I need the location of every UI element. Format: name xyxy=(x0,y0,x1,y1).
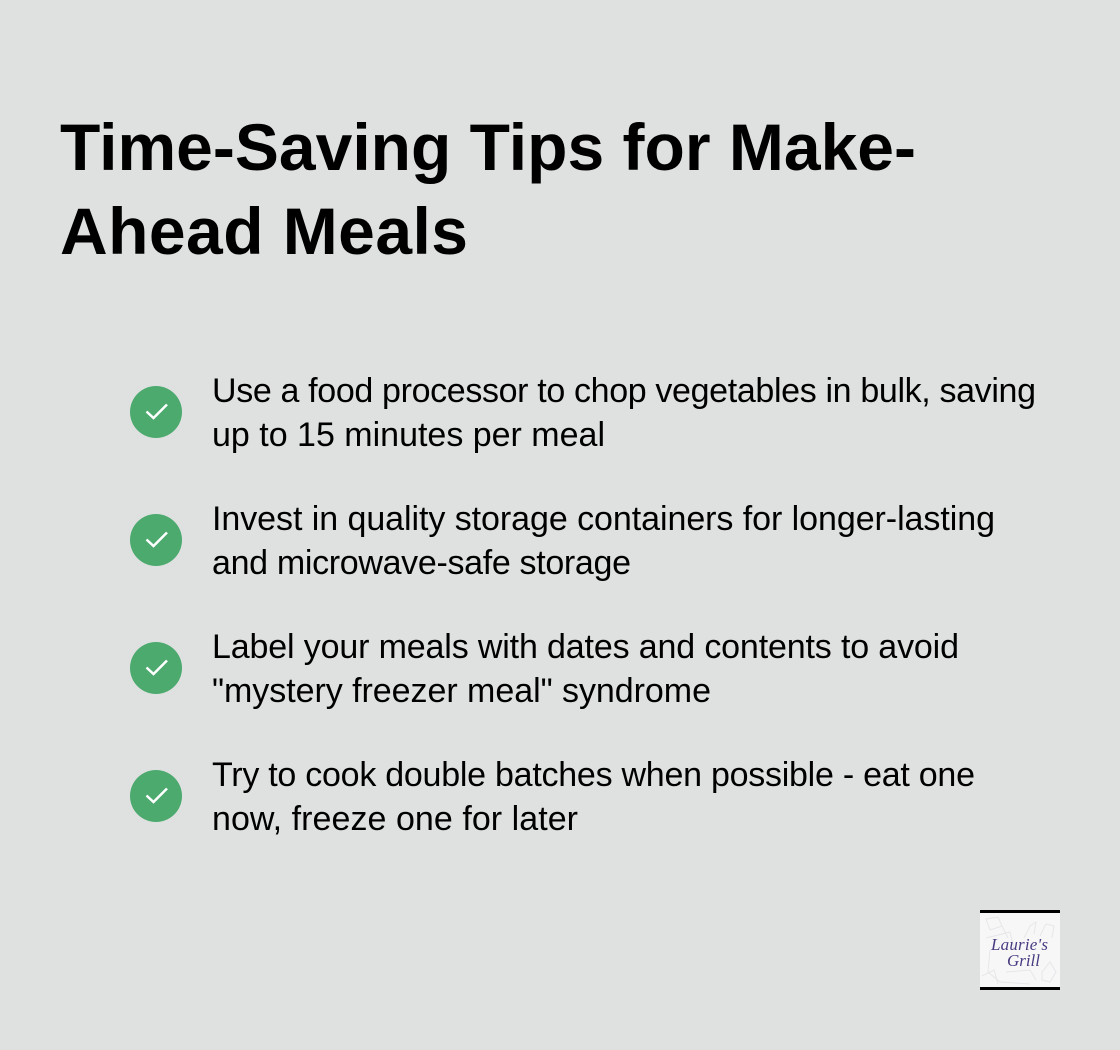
icon: check circle 2 xyxy=(130,514,182,566)
text: tip 4: Try to cook double batches when possible - eat one xyxy=(212,756,975,794)
text: tip 4 xyxy=(212,756,975,838)
logo: Laurie's Grill: Laurie's xyxy=(990,935,1048,954)
text: tip 2: Invest in quality storage containers for longer-lasting xyxy=(212,500,995,538)
text: tip 1 xyxy=(212,372,1036,454)
text: tip 3: Label your meals with dates and contents to avoid xyxy=(212,628,959,666)
text: tip 1: up to 15 minutes per meal xyxy=(212,416,605,454)
logo: Laurie's Grill: Grill xyxy=(1007,951,1040,970)
tip 1 xyxy=(130,372,1036,454)
text: tip 2 xyxy=(212,500,995,582)
title xyxy=(60,110,916,268)
tip 3 xyxy=(130,628,959,710)
tip 4 xyxy=(130,756,975,838)
icon: check circle 3 xyxy=(130,642,182,694)
text: tip 1: Use a food processor to chop vegetables in bulk, saving xyxy=(212,372,1036,410)
title: Ahead Meals xyxy=(60,194,468,268)
text: tip 3 xyxy=(212,628,959,710)
text: tip 4: now, freeze one for later xyxy=(212,800,578,838)
title: Time-Saving Tips for Make- xyxy=(60,110,916,184)
text: tip 2: and microwave-safe storage xyxy=(212,544,631,582)
text: tip 3: "mystery freezer meal" syndrome xyxy=(212,672,711,710)
logo: Laurie's Grill xyxy=(980,910,1060,990)
icon: check circle 4 xyxy=(130,770,182,822)
tip 2 xyxy=(130,500,995,582)
icon: check circle 1 xyxy=(130,386,182,438)
